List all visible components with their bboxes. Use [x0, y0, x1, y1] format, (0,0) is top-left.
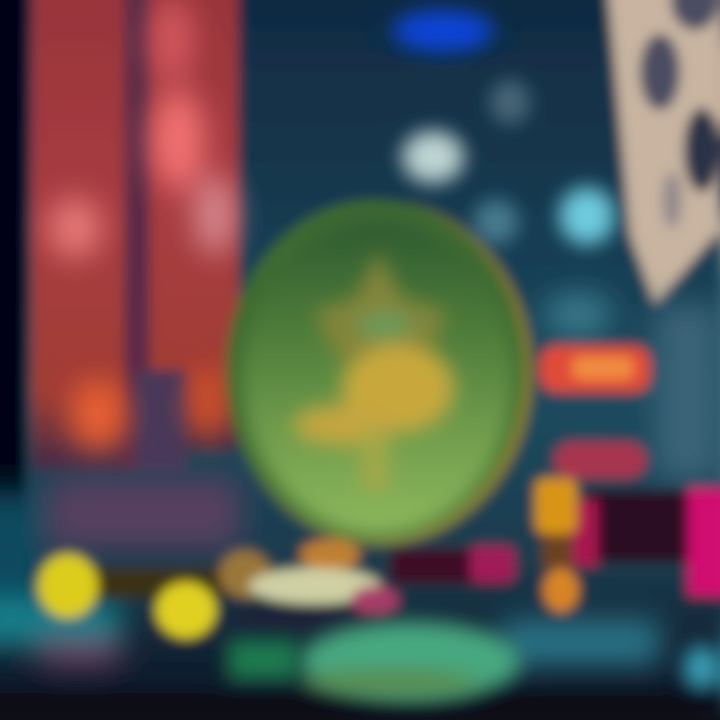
floor reflections: [0, 478, 660, 666]
centre plate stack: [232, 568, 399, 632]
coin stand: [300, 539, 360, 571]
orange neon sign: [540, 346, 650, 392]
coin face: [242, 220, 514, 536]
left dark strip: [0, 0, 26, 520]
bottom shadow: [0, 692, 720, 720]
right edge backing: [700, 0, 720, 720]
blue neon sign: [393, 11, 493, 51]
glowing bokeh lights: [403, 80, 614, 337]
neon highlights on tower: [49, 0, 235, 451]
right lower building: [655, 305, 720, 480]
coin central emblem: [293, 311, 454, 490]
pink and black objects right: [390, 488, 720, 596]
coin star emblem: [314, 252, 448, 362]
red tower left: [32, 0, 238, 470]
orange candle right: [535, 478, 579, 612]
yellow coins left: [38, 550, 271, 638]
coin: [226, 200, 533, 545]
green mound bottom: [228, 622, 720, 702]
pink sign: [554, 442, 646, 478]
cream lattice top right: [605, 0, 720, 305]
coin rim: [227, 201, 533, 545]
